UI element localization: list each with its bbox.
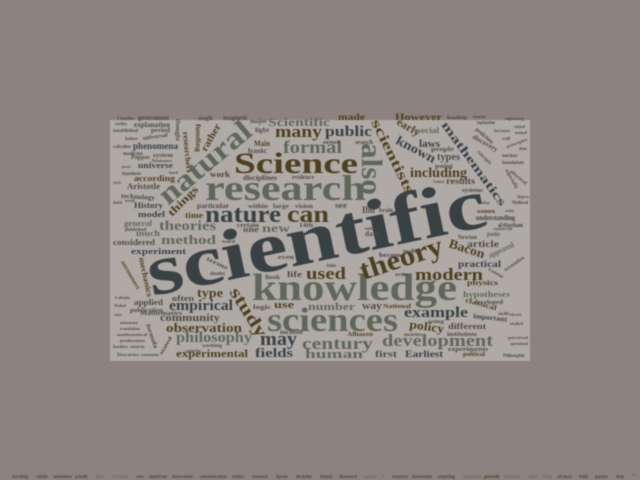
small words in the cloud: centuries xyxy=(185,348,201,353)
small words in the cloud: large xyxy=(273,204,289,210)
word: may: may xyxy=(260,329,298,350)
small words in the cloud: experimental xyxy=(176,349,248,360)
small words in the cloud: John xyxy=(326,264,336,269)
small words in the cloud: Greek xyxy=(113,180,122,185)
small words in the cloud: because xyxy=(494,128,510,133)
small words in the cloud: laws xyxy=(419,139,440,150)
footer strip of faint words: computing xyxy=(437,475,455,480)
small words in the cloud: single xyxy=(198,116,213,122)
word: many: many xyxy=(275,122,323,141)
footer strip of faint words: years xyxy=(136,475,144,480)
footer strip of faint words: / xyxy=(382,475,385,480)
word: scientific: scientific xyxy=(139,163,493,312)
footer strip of faint words: integrated xyxy=(463,475,481,480)
footer strip of faint words: living xyxy=(543,475,552,480)
small words in the cloud: father xyxy=(125,136,138,141)
small words in the cloud: terms xyxy=(205,256,229,272)
small words in the cloud: one xyxy=(243,225,260,234)
small words in the cloud: new xyxy=(262,221,290,235)
small words in the cloud: phenomena xyxy=(133,141,178,151)
small words in the cloud: cause xyxy=(487,267,505,281)
word: research: research xyxy=(205,168,366,208)
small words in the cloud: 14th xyxy=(299,223,314,229)
word: nature: nature xyxy=(205,202,281,228)
footer strip of faint words: sometimes xyxy=(53,475,72,480)
small words in the cloud: use xyxy=(274,300,295,311)
small words in the cloud: physical xyxy=(509,170,528,187)
small words in the cloud: mind xyxy=(515,130,528,135)
word: modern: modern xyxy=(415,265,484,284)
small words in the cloud: commercial xyxy=(493,226,513,231)
small words in the cloud: especially xyxy=(503,168,519,191)
small words in the cloud: Aristotle xyxy=(127,182,160,191)
small words in the cloud: today xyxy=(478,200,490,205)
small words in the cloud: funding xyxy=(194,124,202,153)
footer strip of faint words: discipline xyxy=(296,475,313,480)
small words in the cloud: Bacon xyxy=(447,236,488,262)
footer strip of faint words: describing xyxy=(12,475,28,480)
small words in the cloud: logic xyxy=(253,305,272,311)
word: scientists: scientists xyxy=(367,117,417,197)
small words in the cloud: government xyxy=(138,114,170,122)
footer strip of faint words: popular xyxy=(595,475,609,480)
word: observation: observation xyxy=(166,320,243,335)
small words in the cloud: discovery xyxy=(471,133,500,154)
small words in the cloud: often xyxy=(172,294,195,303)
small words in the cloud: practical xyxy=(458,259,502,269)
small words in the cloud: universe xyxy=(138,161,174,170)
small words in the cloud: al-Haytham xyxy=(498,223,523,229)
small words in the cloud: mechanics xyxy=(137,257,154,298)
small words in the cloud: History xyxy=(134,201,163,210)
small words in the cloud: Aristotelian xyxy=(503,256,526,274)
small words in the cloud: life xyxy=(287,270,303,279)
footer strip of faint words: belief xyxy=(579,475,588,480)
small words in the cloud: developed xyxy=(474,300,504,306)
small words in the cloud: Newton xyxy=(458,235,478,241)
footer strip of faint words: beyond xyxy=(364,475,376,480)
small words in the cloud: point xyxy=(435,164,453,170)
footer strip of faint words: empiricism xyxy=(149,475,168,480)
word: development: development xyxy=(382,331,493,350)
small words in the cloud: general xyxy=(124,219,153,228)
word: method: method xyxy=(161,232,217,247)
word: known: known xyxy=(394,132,439,166)
word: including: including xyxy=(410,166,467,181)
small words in the cloud: productions xyxy=(120,338,146,343)
small words in the cloud: operational xyxy=(510,341,529,346)
small words in the cloud: different xyxy=(448,322,486,331)
small words in the cloud: However xyxy=(395,112,442,122)
word: Science: Science xyxy=(234,147,358,180)
small words in the cloud: considered xyxy=(113,238,156,247)
small words in the cloud: time xyxy=(185,211,204,220)
small words in the cloud: Alhazen xyxy=(347,332,374,338)
small words in the cloud: much xyxy=(136,229,161,238)
small words in the cloud: major xyxy=(250,119,267,125)
small words in the cloud: magnetic xyxy=(223,114,248,122)
small words in the cloud: studied xyxy=(510,321,524,326)
small words in the cloud: first xyxy=(375,349,397,359)
small words in the cloud: community xyxy=(160,313,220,324)
small words in the cloud: applied xyxy=(134,298,164,307)
small words in the cloud: number xyxy=(308,301,355,313)
small words in the cloud: Earliest xyxy=(405,349,443,359)
footer strip of faint words: increased xyxy=(112,475,128,480)
footer strip of faint words xyxy=(12,473,638,480)
small words in the cloud: period xyxy=(151,128,171,134)
word: century: century xyxy=(302,334,374,353)
small words in the cloud: people xyxy=(431,147,454,153)
small words in the cloud: electric xyxy=(510,312,522,317)
small words in the cloud: field xyxy=(113,200,123,205)
small words in the cloud: medicine xyxy=(123,152,144,157)
small words in the cloud: United xyxy=(433,179,445,184)
panel: word cloud xyxy=(110,112,530,361)
small words in the cloud: Charles xyxy=(117,117,134,122)
small words in the cloud: relativity xyxy=(130,344,145,349)
small words in the cloud: Nobel xyxy=(114,303,127,308)
small words in the cloud: stated xyxy=(159,336,174,356)
footer strip of faint words: literature xyxy=(504,475,521,480)
small words in the cloud: working xyxy=(202,344,223,349)
small words in the cloud: understanding xyxy=(476,214,515,222)
small words in the cloud: explanation xyxy=(477,121,495,126)
small words in the cloud: women xyxy=(477,209,496,215)
small words in the cloud: even xyxy=(278,255,295,261)
small words in the cloud: Medieval xyxy=(512,201,528,206)
small words in the cloud: brain xyxy=(379,208,394,214)
word: sciences: sciences xyxy=(267,302,398,339)
small words in the cloud: basic xyxy=(248,147,267,155)
word: study: study xyxy=(226,284,272,341)
small words in the cloud: early xyxy=(394,116,423,139)
small words in the cloud: made xyxy=(338,112,365,122)
small words in the cloud: established xyxy=(113,129,138,134)
small words in the cloud: publication xyxy=(130,308,164,314)
small words in the cloud: mathematical xyxy=(117,332,148,337)
word: empirical: empirical xyxy=(169,298,233,314)
word: natural: natural xyxy=(151,114,258,211)
small words in the cloud: societies xyxy=(404,333,422,338)
footer strip of faint words: actually xyxy=(75,475,88,480)
small words in the cloud: vision xyxy=(295,204,314,210)
footer strip of faint words: deep xyxy=(616,475,624,480)
word: fields: fields xyxy=(255,345,293,360)
small words in the cloud: technology xyxy=(121,192,156,202)
small words in the cloud: rather xyxy=(199,121,224,154)
small words in the cloud: political xyxy=(463,352,485,358)
footer strip of faint words: Islamic xyxy=(320,475,334,480)
small words in the cloud: systems xyxy=(462,188,484,194)
small words in the cloud: Leibnitz xyxy=(115,295,130,300)
small words in the cloud: hypotheses xyxy=(463,290,510,299)
small words in the cloud: doubt xyxy=(210,272,225,277)
small words in the cloud: article xyxy=(467,239,499,249)
word: human: human xyxy=(305,346,364,361)
small words in the cloud: order xyxy=(395,273,410,278)
small words in the cloud: degree xyxy=(517,194,529,199)
small words in the cloud: Mathematics xyxy=(140,311,183,317)
footer strip of faint words: requires xyxy=(392,475,408,480)
small words in the cloud: sense xyxy=(323,140,340,146)
small words in the cloud: Renaissance xyxy=(152,158,172,163)
small words in the cloud: concepts xyxy=(476,150,492,166)
footer strip of faint words: information xyxy=(412,475,432,480)
small words in the cloud: published xyxy=(125,228,146,233)
small words in the cloud: see xyxy=(335,201,348,210)
small words in the cloud: Popper xyxy=(131,155,150,161)
small words in the cloud: bodies xyxy=(113,344,129,349)
small words in the cloud: important xyxy=(473,312,508,324)
small words in the cloud: cases xyxy=(114,312,122,317)
small words in the cloud: make xyxy=(403,249,418,255)
small words in the cloud: hard xyxy=(169,170,179,175)
small words in the cloud: Descartes xyxy=(117,352,140,357)
small words in the cloud: astronomy xyxy=(120,320,138,325)
footer strip of faint words: communications xyxy=(200,475,227,480)
small words in the cloud: word xyxy=(222,240,235,245)
word: public: public xyxy=(325,124,372,140)
footer strip of faint words: research xyxy=(252,475,268,480)
small words in the cloud: Scientific xyxy=(268,115,331,129)
small words in the cloud: way xyxy=(362,301,382,312)
small words in the cloud: engineering xyxy=(505,116,524,121)
small words in the cloud: Ibn xyxy=(362,205,375,215)
small words in the cloud: formula xyxy=(144,324,158,349)
word: philosophy: philosophy xyxy=(176,330,253,346)
footer strip of faint words: observations xyxy=(172,475,193,480)
word: also: also xyxy=(355,143,388,195)
small words in the cloud: institutions xyxy=(447,332,478,338)
small words in the cloud: power xyxy=(122,164,131,169)
word: used: used xyxy=(306,264,347,283)
small words in the cloud: using xyxy=(428,320,445,325)
small words in the cloud: predictions xyxy=(474,127,495,146)
small words in the cloud: nuclear xyxy=(502,154,519,159)
small words in the cloud: system xyxy=(153,153,173,159)
small words in the cloud: sets xyxy=(365,227,375,232)
small words in the cloud: result xyxy=(125,198,136,203)
small words in the cloud: Philosophic xyxy=(503,354,526,359)
footer strip of faint words: — xyxy=(630,473,638,478)
small words in the cloud: appeared xyxy=(487,240,516,260)
small words in the cloud: according xyxy=(134,174,175,183)
small words in the cloud: include xyxy=(280,330,303,336)
small words in the cloud: physics xyxy=(467,279,498,287)
small words in the cloud xyxy=(113,112,529,360)
small words in the cloud: certain xyxy=(237,223,260,229)
small words in the cloud: thin xyxy=(519,146,528,151)
footer strip of faint words: discussed xyxy=(339,475,357,480)
word: knowledge: knowledge xyxy=(252,267,457,309)
small words in the cloud: calculus xyxy=(113,145,131,150)
small words in the cloud: Main xyxy=(254,139,270,148)
small words in the cloud: type xyxy=(197,285,223,300)
small words in the cloud: practice xyxy=(487,232,500,238)
small words in the cloud: results xyxy=(446,176,476,186)
small words in the cloud: skills xyxy=(498,311,511,316)
small words in the cloud: policy xyxy=(409,317,445,336)
small words in the cloud: researchers xyxy=(181,131,194,173)
footer strip of faint words: advances xyxy=(557,475,572,480)
small words in the cloud: model xyxy=(138,210,166,219)
small words in the cloud: principles xyxy=(506,137,529,149)
small words in the cloud: foundations xyxy=(502,161,524,166)
word: theory: theory xyxy=(356,231,447,287)
small words in the cloud: types xyxy=(437,152,460,163)
footer strip of faint words: reliable xyxy=(36,475,49,480)
small words in the cloud: creation xyxy=(505,208,515,213)
footer strip of faint words: offers xyxy=(95,475,105,480)
small words in the cloud: search xyxy=(355,140,374,146)
word: can: can xyxy=(287,202,329,228)
small words in the cloud: thought xyxy=(174,119,180,141)
footer strip of faint words: generally xyxy=(484,475,500,480)
footer strip of faint words: Species xyxy=(276,475,288,480)
word: formal: formal xyxy=(283,137,342,157)
footer strip of faint words: value xyxy=(528,475,538,480)
small words in the cloud: Book xyxy=(265,275,281,281)
small words in the cloud: within xyxy=(248,204,269,210)
small words in the cloud: social xyxy=(417,126,440,135)
small words in the cloud: particular xyxy=(197,202,229,210)
small words in the cloud: explanation xyxy=(134,121,170,129)
small words in the cloud: mention xyxy=(473,114,487,119)
small words in the cloud: things xyxy=(166,183,202,219)
small words in the cloud: experiment xyxy=(131,247,186,256)
small words in the cloud: studies xyxy=(115,121,127,126)
word: example: example xyxy=(404,305,468,321)
small words in the cloud: data xyxy=(365,230,380,238)
word: mathematics: mathematics xyxy=(439,119,510,209)
small words in the cloud: disciplines xyxy=(243,174,277,182)
small words in the cloud: work xyxy=(210,170,231,179)
small words in the cloud: become xyxy=(379,253,405,259)
small words in the cloud: common xyxy=(141,352,160,357)
small words in the cloud: National xyxy=(383,304,411,310)
small words in the cloud: will xyxy=(502,136,511,141)
small words in the cloud: universal xyxy=(142,133,168,142)
small words in the cloud: experiments xyxy=(448,347,489,353)
small words in the cloud: astronomers xyxy=(119,260,141,291)
footer strip of faint words: entities xyxy=(232,475,244,480)
small words in the cloud: hypothesis xyxy=(122,172,141,177)
small words in the cloud: classical xyxy=(464,296,498,312)
small words in the cloud: perceived xyxy=(508,335,529,340)
small words in the cloud: translation xyxy=(120,326,141,331)
small words in the cloud: related xyxy=(514,124,526,129)
word: theories: theories xyxy=(159,219,217,234)
small words in the cloud: leading xyxy=(447,116,468,121)
small words in the cloud: light xyxy=(255,128,269,134)
small words in the cloud: evidence xyxy=(292,175,314,181)
